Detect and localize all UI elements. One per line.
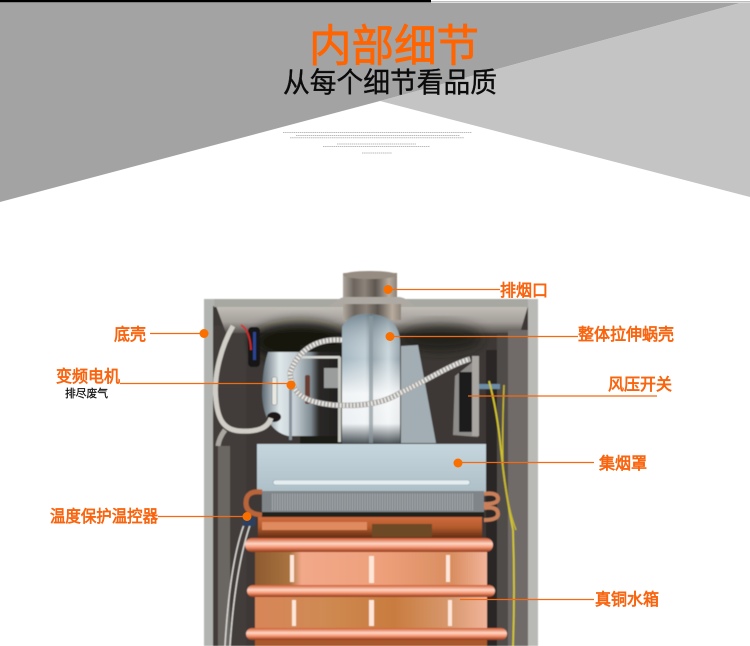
white sensor wires	[225, 522, 250, 646]
callout: 真铜水箱: 真铜水箱	[595, 590, 659, 609]
callout: 集烟罩: 集烟罩	[599, 454, 647, 473]
callout: 温度保护温控器	[50, 507, 252, 526]
motor	[262, 352, 341, 442]
callout: 变频电机: 排尽废气	[65, 386, 108, 400]
callout: 整体拉伸蜗壳: 整体拉伸蜗壳	[578, 325, 674, 344]
volute housing	[342, 314, 400, 443]
collector hood	[257, 444, 486, 492]
callout: 排烟口: 排烟口	[500, 281, 548, 300]
callout: 温度保护温控器: 温度保护温控器	[50, 507, 158, 526]
connector with red and blue wires	[241, 325, 260, 367]
water heater interior photo	[204, 271, 538, 646]
copper water tank	[243, 492, 507, 646]
callout: 排烟口	[384, 281, 548, 300]
heat exchanger fins	[262, 491, 484, 517]
wire bundle left	[215, 326, 271, 431]
callout: 底壳: 底壳	[114, 325, 146, 344]
outer shell	[204, 299, 538, 646]
corrugated hose	[290, 340, 470, 405]
yellow wires	[489, 381, 514, 646]
title: 内部细节	[309, 22, 479, 71]
subtitle: 从每个细节看品质	[283, 67, 497, 98]
callout: 整体拉伸蜗壳	[386, 325, 674, 344]
flue neck	[343, 304, 401, 320]
callout: 变频电机	[56, 367, 296, 400]
callout: 变频电机: 变频电机	[56, 367, 120, 386]
illegible small caption	[283, 132, 472, 153]
callout: 底壳	[114, 325, 208, 344]
callout: 集烟罩	[454, 454, 647, 473]
mounting plate	[401, 345, 436, 443]
header background	[0, 0, 750, 202]
pressure switch	[453, 356, 500, 437]
flange	[330, 297, 414, 306]
flue cylinder upper	[343, 271, 397, 300]
callout: 风压开关: 风压开关	[608, 375, 672, 394]
